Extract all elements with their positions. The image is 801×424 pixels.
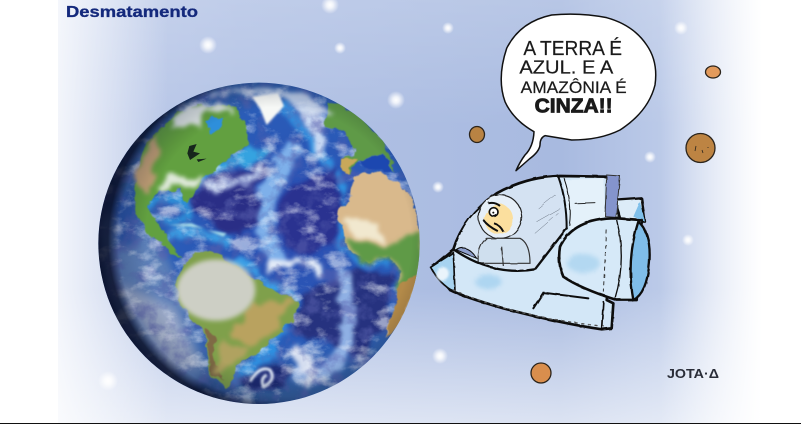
speech text: AZUL. E A <box>519 56 614 77</box>
cockpit rim and hull lines <box>453 177 607 328</box>
stars <box>98 0 694 391</box>
Greenland <box>252 93 284 125</box>
mast <box>605 175 620 217</box>
globe: Earth with grey Amazon <box>97 80 423 407</box>
shallow light-blue shelves <box>150 110 390 380</box>
nose cone <box>431 253 455 292</box>
speech text: AMAZÔNIA É <box>521 78 627 97</box>
speech text: CINZA!! <box>535 95 613 117</box>
dark Atlantic basins <box>193 163 393 392</box>
North America <box>133 104 250 258</box>
asteroid: large right <box>686 134 715 162</box>
cockpit glass <box>456 177 567 270</box>
Caribbean islands <box>168 223 227 237</box>
deforested grey Amazon <box>177 259 255 321</box>
asteroid: bottom <box>531 363 551 383</box>
astronaut suit <box>478 238 530 266</box>
South Atlantic storm <box>250 369 272 387</box>
astronaut helmet and face <box>478 195 522 238</box>
speech text <box>519 37 627 117</box>
asteroid: upper left <box>470 126 484 142</box>
hull <box>432 176 620 329</box>
asteroid: small top right <box>706 66 720 78</box>
South America <box>176 250 297 388</box>
title: Desmatamento <box>66 4 198 21</box>
speech bubble <box>501 14 656 171</box>
rear fin <box>617 198 645 222</box>
speech text: A TERRA É <box>523 37 622 60</box>
signature: JOTA·Δ <box>667 367 719 381</box>
asteroids <box>470 66 720 383</box>
seat <box>457 248 477 258</box>
engine nacelle <box>559 218 642 300</box>
Africa <box>340 172 423 340</box>
Pacific clouds <box>102 202 208 387</box>
spaceship with astronaut <box>431 175 650 329</box>
Arctic clouds <box>207 87 333 117</box>
Atlantic cloud bands <box>207 113 347 380</box>
noise: dark ocean and cloud streaks <box>97 80 423 407</box>
Great Lakes <box>187 144 207 162</box>
Europe <box>323 100 397 172</box>
